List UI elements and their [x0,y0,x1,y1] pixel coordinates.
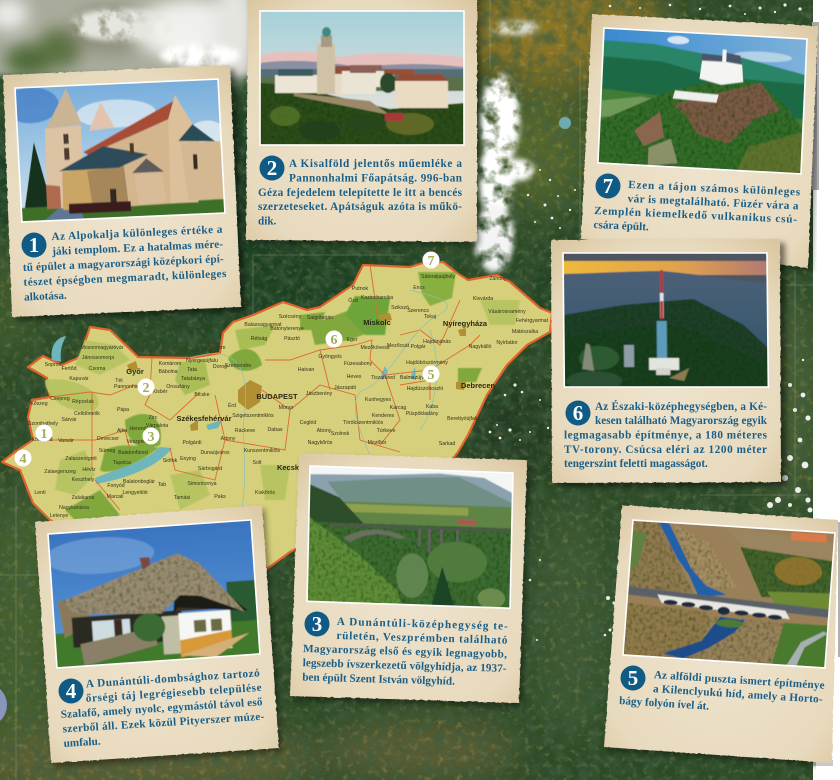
place names: Győr [126,367,144,376]
place names: Tét [115,378,123,384]
place names: Füzesabony [344,361,373,367]
clouds [0,0,812,641]
place names: Nagykálló [469,344,492,350]
marker 5 [422,366,440,383]
text 2: szerzeteseket. Apátságuk azóta is műkö- [258,201,462,213]
place names: Dorog [213,364,227,370]
text 6: TV-torony. Csúcsa eléri az 1200 méter [564,444,767,456]
place names: Lengyeltóti [122,490,148,496]
photo: Nine-arch bridge [623,520,835,668]
place names: Nyíregyháza [443,319,488,328]
place names: Paks [214,494,226,500]
marker 3 [142,428,160,445]
place names: Jászapáti [334,385,356,391]
place names: Balassagyarmat [244,322,282,328]
number badge 3 [304,612,330,636]
green regions [45,272,520,530]
cities blobs [238,380,262,410]
place names: Berettyóújfalu [447,416,479,422]
place names: Lenti [34,490,46,496]
text 7: csára épült. [593,219,649,233]
place names: Siófok [163,458,178,464]
place names: Vásárosnamény [488,309,526,315]
text 1 [21,224,228,304]
place names: Fonyód [107,483,125,489]
text 3: rületén, Veszprémben található [336,630,508,647]
place names: Salgótarján [307,315,333,321]
place names: Zalaszentgrót [65,456,97,462]
place names: Csorna [89,366,105,372]
photo: thatched house [43,520,261,668]
place names: Kunszentmiklós [244,448,281,454]
marker 6: 6 [330,333,338,348]
place names: Herend [129,426,147,432]
place names: Ózd [348,297,358,304]
place names: Nagykanizsa [59,505,89,511]
place names: Kazincbarcika [361,295,393,301]
place names: Székesfehérvár [176,414,232,423]
place names: Pápa [117,407,129,413]
place names: Enying [180,456,196,462]
place names: Várpalota [146,423,168,429]
marker 4 [14,450,32,467]
text 6: kesen található Magyarország egyik [595,415,768,427]
place names: Kunhegyes [365,397,391,403]
place names: BUDAPEST [256,392,298,401]
marker 1 [36,424,52,442]
marker 4: 4 [20,452,26,467]
number badge 7 [596,174,620,198]
text 1: jáki templom. Ez a hatalmas mére- [51,238,224,258]
place names: Sopron [45,362,61,368]
marker 3: 3 [148,430,154,445]
text 2: Pannonhalmi Főapátság. 996-ban [289,172,463,184]
text 5: Az alföldi puszta ismert építménye [654,669,825,692]
place names: Nyergesújfalu [186,358,218,364]
text 2: A Kisalföld jelentős műemléke a [289,158,462,170]
place names: Kisvárda [473,296,493,302]
place names: Polgárdi [182,440,202,446]
place names: Kiskőrös [255,490,275,496]
place names: Heves [347,374,362,380]
place names: Sárbogárd [198,466,222,472]
place names: Tab [158,482,166,488]
place names: Marcali [107,494,123,500]
place names: Püspökladány [406,411,439,417]
text 6: legmagasabb építménye, a 180 méteres [564,430,768,442]
place names: Hajdúnánás [423,339,451,345]
place names: Mezőtúr [368,440,387,446]
number badge 5: 5 [628,666,638,690]
place names: Zalakaros [72,495,95,501]
place names: Szombathely [28,421,58,427]
place names: Sümeg [99,448,115,454]
place names: Szentendre [225,363,251,369]
place names: Tatabánya [181,376,205,382]
place names: Polgár [410,344,426,350]
text 3: A Dunántúli-középhegység te- [337,616,508,633]
text 6 [564,401,768,470]
place names: Zirc [149,415,158,421]
place names: Zalaegerszeg [44,469,76,475]
county borders and rivers [50,265,480,510]
place names: Mosonmagyaróvár [81,345,124,351]
marker 2: 2 [142,381,150,396]
place names: Debrecen [461,381,496,390]
place names: Oroszlány [166,384,190,390]
place names: Miskolc [363,318,391,327]
place names: Sárvár [61,417,77,423]
place names: Nyírbátor [496,340,518,346]
place names: Tokaj [424,314,436,320]
place names: Letenye [50,513,68,519]
text 7 [593,178,801,240]
place names: Mátészalka [512,329,538,335]
place names: Monor [279,405,294,411]
place names: Bicske [194,392,210,398]
place names: Szigetszentmiklós [232,413,274,419]
place names: Fertőd [62,366,77,372]
text 1: tű épület a magyarországi középkori épí- [23,253,224,274]
text 2 [258,158,463,228]
place names: Vasvár [58,438,74,444]
place names: Balmazújváros [400,375,434,381]
place names: Érd [228,402,236,409]
place names: Devecser [97,436,119,442]
panel 1: Ják [2,65,246,321]
place names: Putnok [352,286,368,292]
photo: Pannonhalma abbey [260,11,464,145]
number badge 5 [620,666,646,690]
text 1: alkotása. [24,290,67,304]
place names: Törökszentmiklós [343,420,384,426]
place names: Solt [253,460,262,466]
place names: Rétság [251,336,267,342]
place names [28,274,549,519]
text 4: Szalafő, amely nyolc, egymástól távol eső [60,696,263,721]
number badge 6 [566,400,590,426]
place names: Szerencs [407,308,429,314]
place names: Jászberény [306,391,333,397]
text 5 [619,667,825,720]
text 7: vár is megtalálható. Füzér vára a [627,193,799,212]
place names: Celldömölk [74,411,100,417]
photo: Veszprém viaduct [307,466,513,609]
marker 7: 7 [428,254,434,269]
place names: Cegléd [300,420,316,426]
place names: Mezőcsát [387,343,410,349]
text 4: szerből áll. Ezek közül Pityerszer múze- [62,711,265,735]
lakes [52,336,66,362]
text 6: Az Északi-középhegységben, a Ké- [595,401,767,413]
place names: Jánossomorja [82,355,114,361]
text 4: A Dunántúli-dombsághoz tartozó [86,667,260,690]
place names: Kecsk [277,463,300,472]
text 4 [59,667,266,750]
text 6: tengerszint feletti magasságot. [564,458,708,470]
text 7: Ezen a tájon számos különleges [628,179,801,198]
place names: Balatonfüred [118,450,148,456]
place names: Esztergom [201,345,225,351]
place names: Répcelak [72,399,94,405]
place names: Körmend [31,437,53,443]
place names: Ajka [117,428,127,434]
place names: Szolnok [331,431,350,437]
number badge 4: 4 [66,679,77,703]
place names: Eger [347,337,358,343]
place names: Hévíz [82,467,96,473]
text 3: ben épült Szent István völgyhíd. [302,671,455,688]
number badge 3: 3 [312,612,322,636]
place names: Tiszafüred [371,375,395,381]
place names: Balatonboglár [123,479,155,485]
place names: Tamási [174,495,190,501]
place names: Karcag [390,405,406,411]
place names: Kőszeg [30,401,48,407]
text 3: legszebb ívszerkezetű völgyhídja, az 1937- [303,657,507,675]
place names: Nagykőrös [308,440,333,446]
number badge 2: 2 [267,156,277,180]
place names: Bábolna [158,369,178,375]
number badge 1 [22,232,46,258]
panel 2: Pannonhalma [246,0,480,245]
blue circle at left edge [0,683,7,727]
number badge 7: 7 [603,174,613,198]
text 2: Géza fejedelem telepítette le itt a bencés [258,187,463,199]
place names: Kapuvár [69,376,89,382]
place names: Kenderes [372,413,395,419]
marker 5: 5 [428,368,434,383]
photo: Kékes TV tower [563,253,768,391]
place names: Szikszó [391,305,409,311]
place names: Adony [221,436,236,442]
place names: Kaba [426,404,438,410]
place names: Záhony [489,276,507,282]
place names: Hajdúböszörmény [406,360,448,366]
marker 7 [422,252,440,269]
place names: Sarkad [439,441,455,447]
place names: Pásztó [284,336,300,342]
place names: Simontornya [187,481,217,487]
text 1: Az Alpokalja különleges értéke a [51,224,223,243]
text 5: bágy folyón ível át. [619,695,710,713]
marker 2 [138,378,154,396]
text 4: umfalu. [63,736,101,750]
marker 6 [326,330,342,348]
place names: Bátonyterenye [270,326,304,332]
place names: Tapolca [113,460,131,466]
place names: Csepreg [50,396,70,402]
number badge 2 [260,156,284,180]
place names: Abony [317,428,332,434]
marker 1: 1 [40,427,48,442]
place names: Mezőkövesd [360,345,390,351]
text 3 [302,615,508,689]
photo: Füzér castle [598,28,808,174]
place names: Keszthely [72,477,95,483]
text 3: Magyarország első és egyik legnagyobb, [303,643,507,661]
text 2: dik. [258,216,277,228]
text 1: tészet épségben megmaradt, különleges [23,268,227,289]
number badge 1: 1 [29,233,39,257]
number badge 6: 6 [573,401,583,425]
lake dot on satellite map [559,117,571,129]
panel 3: Veszprém [290,453,530,707]
place names: Tata [187,367,197,373]
panel 5: Hortobágy [604,505,840,767]
panel 7: Füzér [581,14,822,271]
map of Hungary [2,252,552,570]
place names: Hatvan [298,367,314,373]
place names: Fehérgyarmat [516,318,549,324]
place names: Ráckeve [235,428,255,434]
photo: Ják church [2,79,236,223]
panel 4: Szalafő [35,505,282,767]
number badge 4 [58,678,84,704]
place names: Hajdúszoboszló [407,386,443,392]
place names: Szécsény [279,314,302,320]
place names: Encs [413,285,425,291]
place names: Komárom [159,361,181,367]
place names: Dunaújváros [200,450,230,456]
place names: Gyöngyös [318,354,342,360]
place names: Pannonhalma [114,384,146,390]
panel 6: Kékes [551,239,786,487]
place names: Dabas [268,427,283,433]
country shape [2,262,552,570]
place names: Sátoraljaújhely [421,274,455,280]
text 7: Zemplén kiemelkedő vulkanikus csú- [594,205,797,226]
place names: Veszprém [126,439,150,445]
place names: Kisbér [153,389,168,395]
place names: Túrkeve [377,428,395,434]
text 4: őrségi táj legrégiesebb települése [85,682,262,705]
text 5: a Kilenclyukú híd, amely a Horto- [653,683,823,706]
